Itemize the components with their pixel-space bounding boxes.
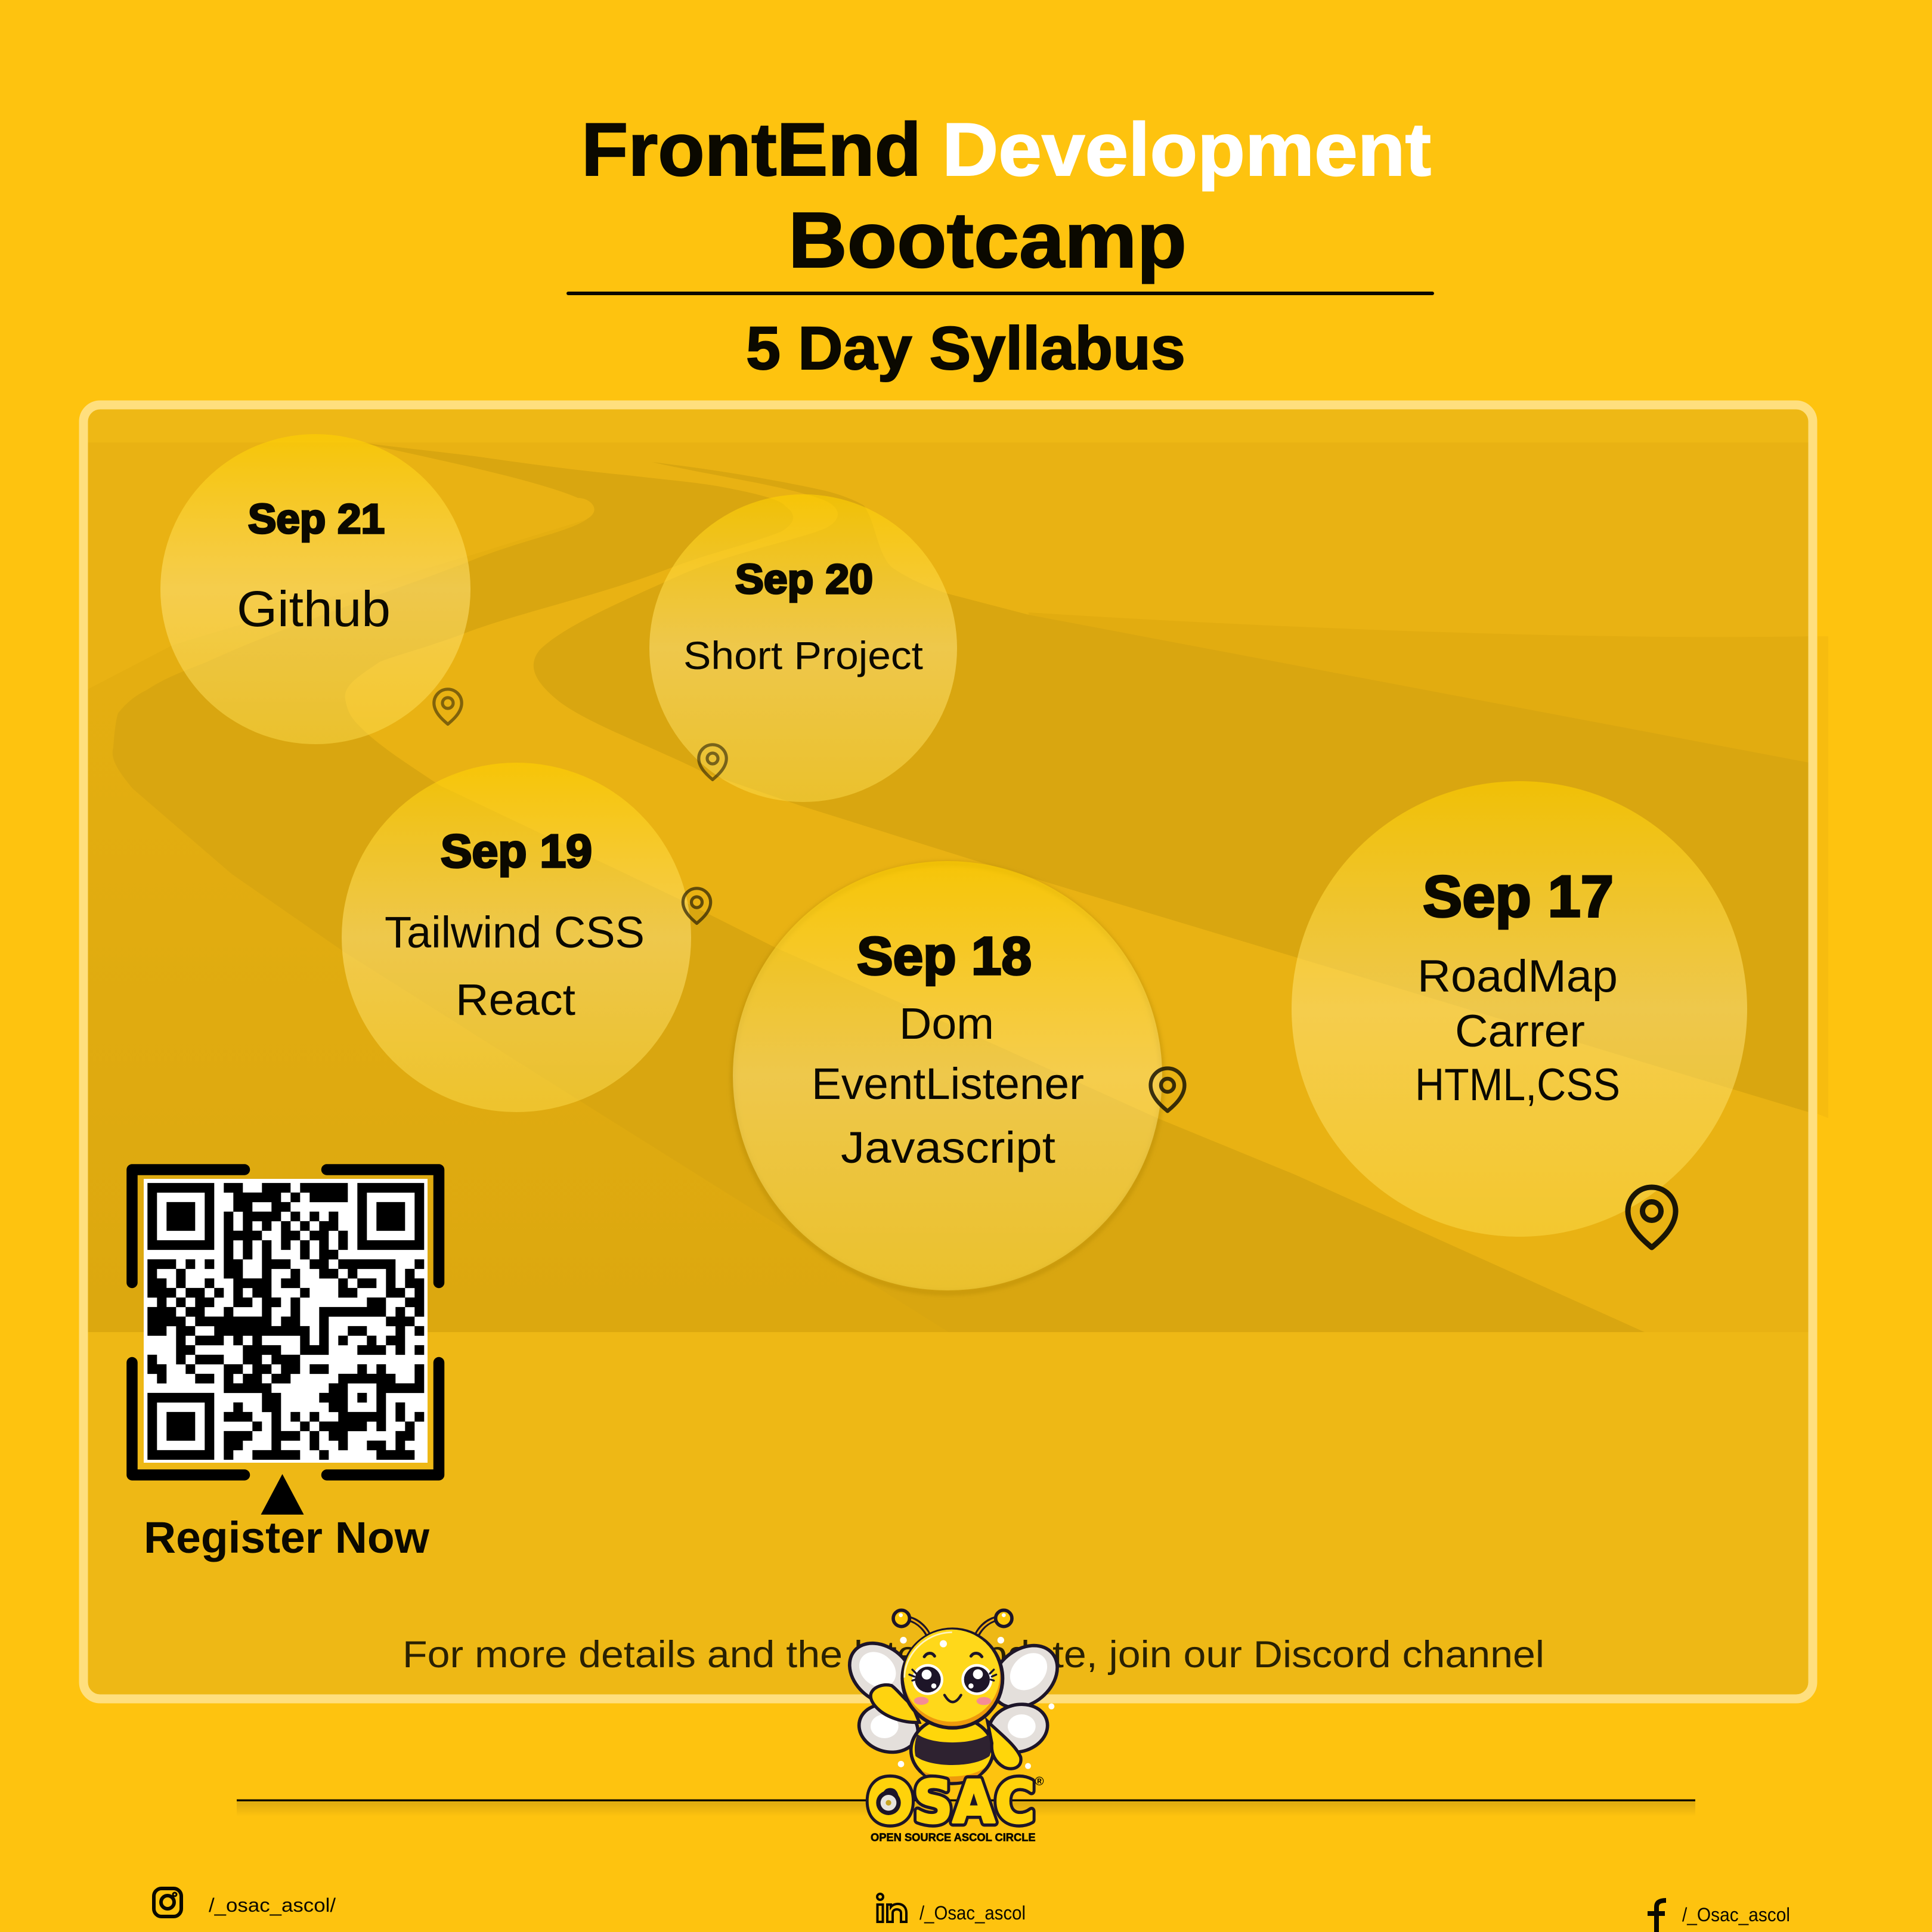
lashes (909, 1670, 996, 1680)
bee body (911, 1717, 993, 1784)
QR corner brackets (132, 1170, 439, 1475)
QR code (147, 1188, 424, 1455)
icon: pin Sep 19 (683, 888, 711, 923)
node: Sep 19 (342, 763, 691, 1112)
topic: html css: HTML,CSS (1415, 1060, 1620, 1110)
register label: Register Now (144, 1513, 429, 1562)
social: instagram (154, 1888, 336, 1916)
icon: instagram (154, 1888, 181, 1916)
topic: roadmap: RoadMap (1417, 951, 1618, 1002)
node: Sep 20 (649, 494, 957, 802)
QR white plate (144, 1179, 428, 1463)
topic: javascript: Javascript (841, 1123, 1055, 1172)
arrow pointing at QR (261, 1474, 304, 1515)
topic: react: React (456, 975, 575, 1024)
smile (945, 1695, 961, 1702)
title line 2: Bootcamp (788, 196, 1187, 284)
date: Sep 21 (248, 496, 385, 542)
QR registration block (132, 1170, 439, 1562)
discord note: For more details and the latest update, join our Discord channel (402, 1634, 1544, 1676)
social: facebook (1648, 1900, 1790, 1932)
title line 1 dark: FrontEnd (581, 107, 921, 191)
bee waving arm (871, 1685, 919, 1722)
icon: pin Sep 20 (699, 745, 726, 779)
node: Sep 18 (733, 861, 1162, 1293)
subtitle: 5 Day Syllabus (746, 314, 1185, 382)
icon: linkedin (877, 1894, 906, 1922)
date: Sep 20 (735, 556, 873, 602)
band overflow right of panel (1818, 636, 1828, 1118)
icon: pin Sep 17 (1628, 1187, 1676, 1247)
bee head (893, 1610, 1012, 1728)
handle: /_Osac_ascol (919, 1902, 1026, 1924)
OSAC wordmark: OSAC (867, 1769, 1035, 1837)
cheeks (914, 1697, 928, 1705)
eyebrows (924, 1653, 982, 1657)
date: Sep 18 (857, 927, 1032, 986)
icon: pin Sep 18 (1151, 1069, 1184, 1111)
date: Sep 17 (1423, 863, 1614, 929)
OSAC wordmark: OSAC (867, 1769, 1035, 1837)
icon: pin Sep 21 (434, 689, 462, 724)
logo tagline: OPEN SOURCE ASCOL CIRCLE (871, 1831, 1036, 1843)
logo: OSAC bee (838, 1610, 1070, 1843)
handle: /_osac_ascol/ (209, 1894, 336, 1916)
footer divider (237, 1800, 1695, 1816)
title (581, 107, 1431, 284)
handle: /_Osac_ascol (1682, 1904, 1790, 1925)
topic: dom: Dom (899, 999, 994, 1048)
topic: carrer: Carrer (1455, 1006, 1585, 1057)
topic: tailwind: Tailwind CSS (385, 908, 645, 957)
date: Sep 19 (441, 825, 592, 877)
title line 1 white: Development (942, 107, 1431, 191)
topic: Short Project (683, 633, 923, 677)
node: Sep 21 (160, 434, 470, 744)
topic: eventlistener: EventListener (812, 1059, 1084, 1109)
node: Sep 17 (1292, 781, 1747, 1237)
road background (88, 442, 1828, 1332)
registered mark: ® (1035, 1775, 1044, 1788)
antennae (906, 1618, 999, 1644)
topic: Github (237, 581, 391, 637)
eyes (912, 1664, 943, 1695)
sparkles (898, 1637, 1054, 1769)
social: linkedin (877, 1894, 1026, 1924)
bee wings (838, 1631, 1070, 1758)
bee right arm (987, 1722, 1021, 1769)
panel: syllabus (83, 405, 1828, 1699)
icon: facebook (1648, 1900, 1666, 1932)
